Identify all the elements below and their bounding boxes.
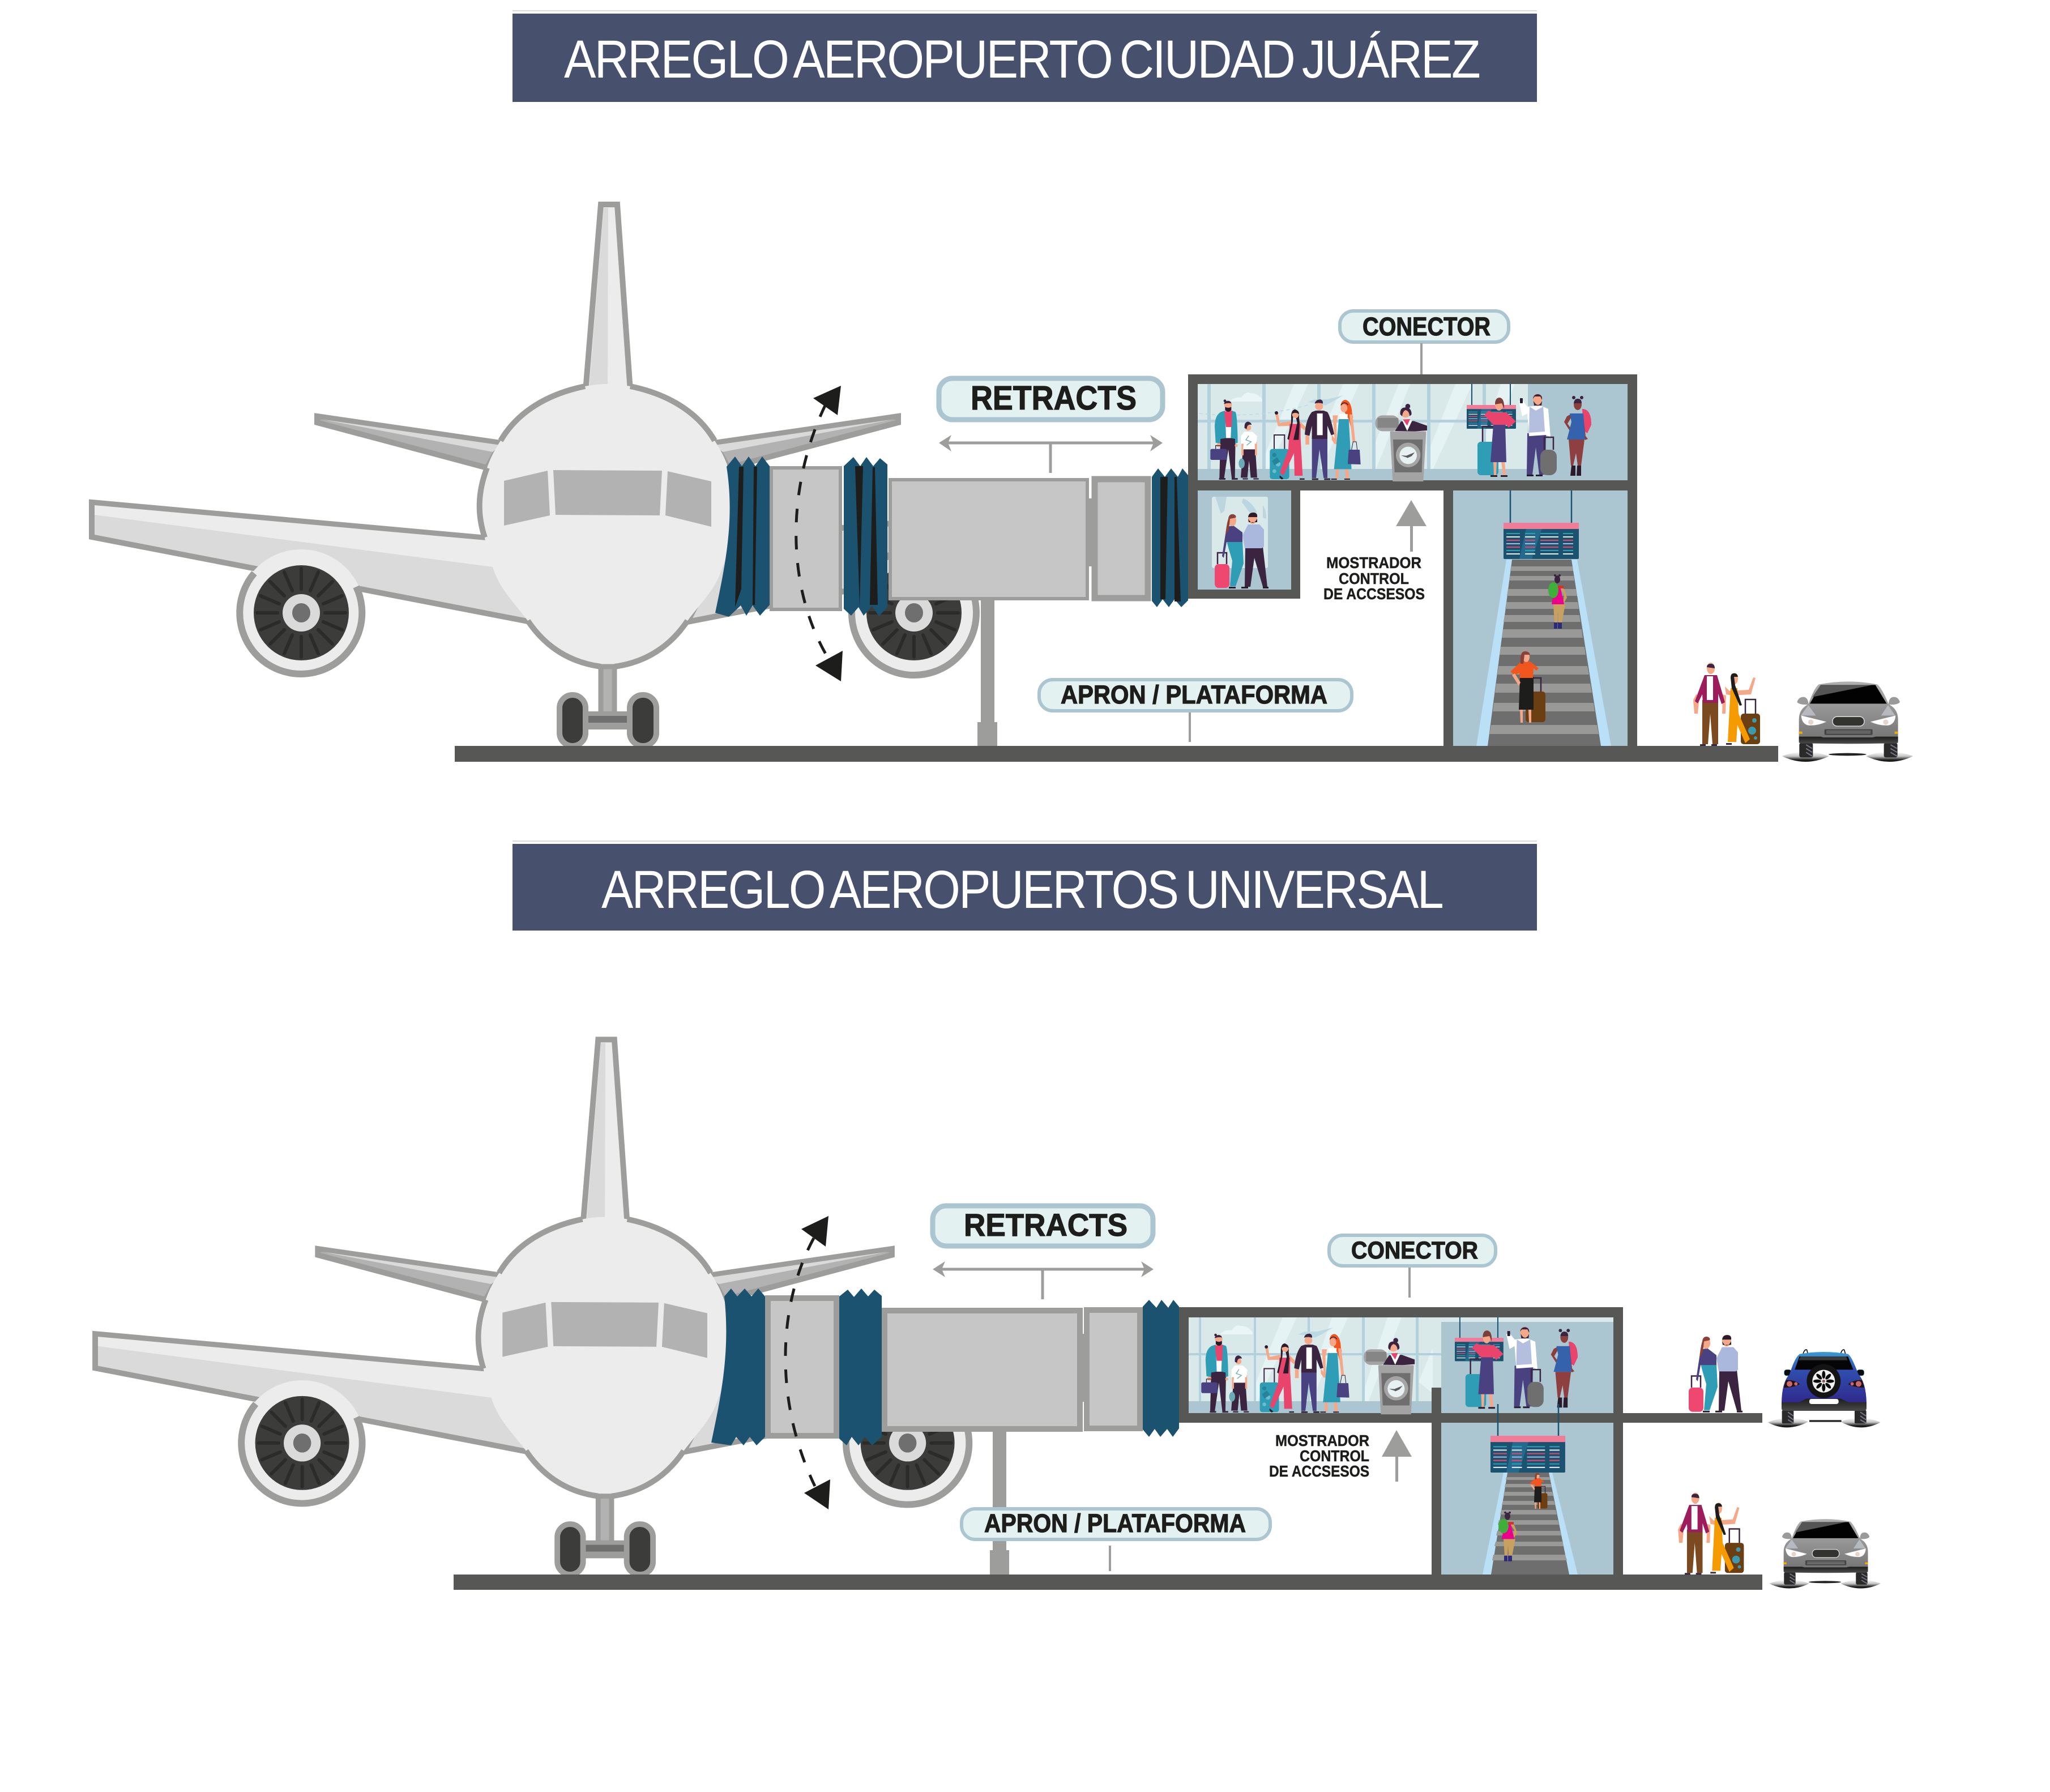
- title: Arreglo Aeropuerto Ciudad Juárez: [512, 10, 1537, 102]
- label: mostrador control de accesos: [1269, 1432, 1369, 1480]
- people: couple upper level: [1689, 1335, 1743, 1413]
- building structure walls: [1179, 1307, 1623, 1575]
- car: blue rear: [1768, 1350, 1881, 1427]
- label: apron plataforma: [1039, 680, 1352, 742]
- escalator: [1476, 560, 1611, 746]
- title: Arreglo Aeropuertos Universal: [512, 840, 1537, 931]
- flight board over escalator: [1490, 1404, 1565, 1473]
- upper lounge background: [1189, 1317, 1613, 1413]
- terminal rooms: upper lounge background: [1198, 384, 1628, 481]
- bellows: terminal side: [1143, 1300, 1179, 1437]
- flight board over escalator: [1504, 490, 1579, 559]
- people: check-in queue with attendant desk: [1210, 399, 1427, 481]
- people: right group with flight board: [1455, 1317, 1578, 1409]
- label: retracts: RETRACTS: [971, 379, 1137, 417]
- ground: [454, 1575, 1762, 1590]
- panel: Universal arrangement: [95, 840, 1881, 1590]
- label: apron plataforma: APRON / PLATAFORMA: [1061, 680, 1327, 709]
- label: mostrador control de accesos: CONTROL: [1339, 570, 1409, 587]
- label: conector: CONECTOR: [1351, 1237, 1478, 1264]
- label: apron plataforma: APRON / PLATAFORMA: [984, 1509, 1246, 1538]
- label: mostrador control de accesos: DE ACCSESOS: [1269, 1462, 1369, 1480]
- car: gray front: [1782, 681, 1913, 762]
- person on escalator: woman: [1530, 1473, 1547, 1509]
- bellows: mid: [839, 1288, 882, 1445]
- boarding bridge pole: [990, 1427, 1009, 1575]
- bridge retractable segments: [768, 1298, 1140, 1436]
- panel: Ciudad Juárez arrangement: [92, 10, 1913, 762]
- upper platform: [1623, 1413, 1762, 1423]
- label: conector: [1340, 311, 1509, 375]
- building structure walls: [1188, 374, 1637, 746]
- label: retracts: [933, 1206, 1153, 1246]
- escalator: [1483, 1473, 1578, 1575]
- arrow: up to desk: [1382, 1430, 1412, 1482]
- illustration: airplane front view: [92, 204, 1124, 746]
- label: conector: CONECTOR: [1363, 312, 1490, 341]
- people: couple at curb: [1693, 663, 1760, 746]
- people: right group with flight board: [1467, 384, 1591, 477]
- label: apron plataforma: [962, 1509, 1270, 1571]
- person on escalator: girl: [1548, 574, 1567, 629]
- ground: [455, 746, 1778, 762]
- arrow: dashed swing arc: [785, 1216, 830, 1509]
- title: Arreglo Aeropuerto Ciudad Juárez: ARREGLO AEROPUERTO CIUDAD JUÁREZ: [564, 29, 1480, 89]
- bellows: plane side: [711, 1288, 765, 1445]
- arrow: retracts double-headed: [939, 435, 1163, 473]
- arrow: up to desk: [1396, 500, 1427, 552]
- label: conector: [1329, 1235, 1496, 1298]
- label: mostrador control de accesos: CONTROL: [1300, 1447, 1369, 1465]
- title: Arreglo Aeropuertos Universal: ARREGLO AEROPUERTOS UNIVERSAL: [601, 860, 1442, 920]
- arrow: dashed swing arc: [796, 386, 843, 681]
- label: mostrador control de accesos: DE ACCSESOS: [1323, 585, 1425, 603]
- person on escalator: girl: [1498, 1512, 1517, 1561]
- lower-left room background: [1198, 490, 1291, 590]
- people: check-in queue with attendant desk: [1201, 1334, 1415, 1414]
- car: gray front lower: [1769, 1519, 1881, 1589]
- label: mostrador control de accesos: MOSTRADOR: [1326, 554, 1421, 571]
- escalator hall background: [1453, 490, 1628, 746]
- person on escalator: woman: [1510, 651, 1545, 723]
- arrow: retracts double-headed: [933, 1261, 1154, 1299]
- label: retracts: RETRACTS: [964, 1207, 1128, 1243]
- bellows: mid: [844, 457, 887, 616]
- people: couple lower level: [1678, 1492, 1744, 1575]
- label: mostrador control de accesos: [1323, 554, 1425, 603]
- label: mostrador control de accesos: MOSTRADOR: [1275, 1432, 1369, 1449]
- escalator hall background: [1441, 1423, 1613, 1575]
- boarding bridge pole: [977, 595, 997, 746]
- bellows: terminal side: [1152, 468, 1188, 607]
- bellows: plane side: [715, 456, 770, 617]
- illustration: airplane front view: [95, 1039, 1114, 1575]
- people: couple in lower room: [1215, 513, 1269, 588]
- bridge retractable segments: [771, 468, 1148, 609]
